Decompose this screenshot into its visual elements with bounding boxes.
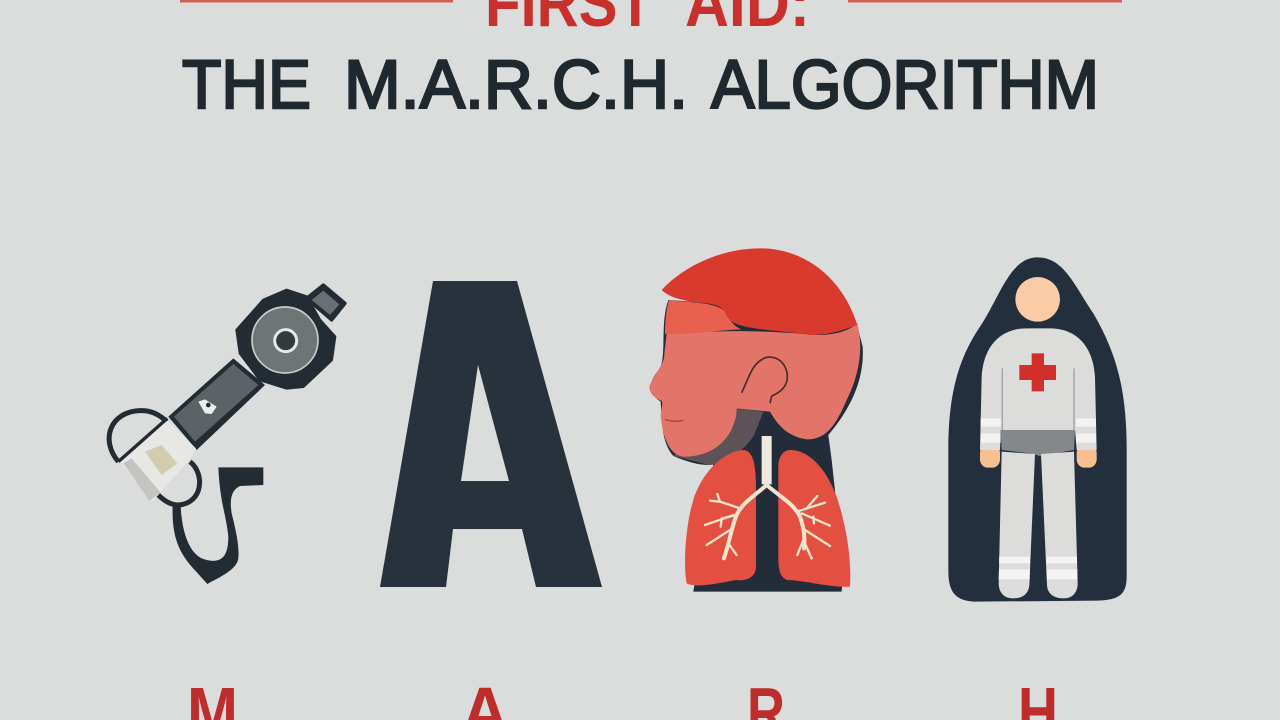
dark neck and chest backing <box>651 300 863 592</box>
figure head <box>1015 277 1060 322</box>
figure belt <box>1001 430 1075 456</box>
red hair cap <box>662 248 857 335</box>
header rule left <box>180 0 453 2</box>
dark body bag <box>948 257 1127 602</box>
ear line <box>742 357 787 403</box>
title: the march algorithm: ALGORITHM <box>711 46 1099 123</box>
skin face <box>649 323 860 457</box>
right lung <box>778 450 850 587</box>
tourniquet handle <box>168 358 265 450</box>
title: first aid <box>485 0 810 41</box>
red cross <box>1019 353 1056 391</box>
big letter A <box>380 281 602 587</box>
icon: tourniquet <box>109 285 345 584</box>
tourniquet loops <box>158 462 200 505</box>
tourniquet white pad <box>121 421 196 502</box>
skin upper band <box>665 300 742 334</box>
tourniquet dial <box>252 307 318 373</box>
figure leg bands <box>999 557 1077 579</box>
title: the march algorithm: THE <box>182 46 311 123</box>
figure legs <box>999 452 1035 598</box>
figure hands <box>980 445 1000 468</box>
header rule right <box>848 0 1122 2</box>
mouth line <box>665 419 683 421</box>
figure arms and torso <box>980 328 1097 450</box>
tourniquet hook strap <box>173 467 263 584</box>
icon: patient figure <box>948 257 1127 602</box>
icon: head and lungs <box>649 248 863 592</box>
tourniquet clip mark <box>198 399 217 414</box>
bronchi <box>705 485 830 558</box>
tourniquet stub <box>307 285 345 320</box>
trachea <box>762 436 772 484</box>
neck shadow <box>673 408 763 465</box>
title: the march algorithm <box>182 46 1099 123</box>
tourniquet dial housing <box>237 290 335 388</box>
figure arm bands <box>981 418 1096 443</box>
left lung <box>685 450 756 585</box>
title: the march algorithm: M.A.R.C.H. <box>344 46 688 123</box>
